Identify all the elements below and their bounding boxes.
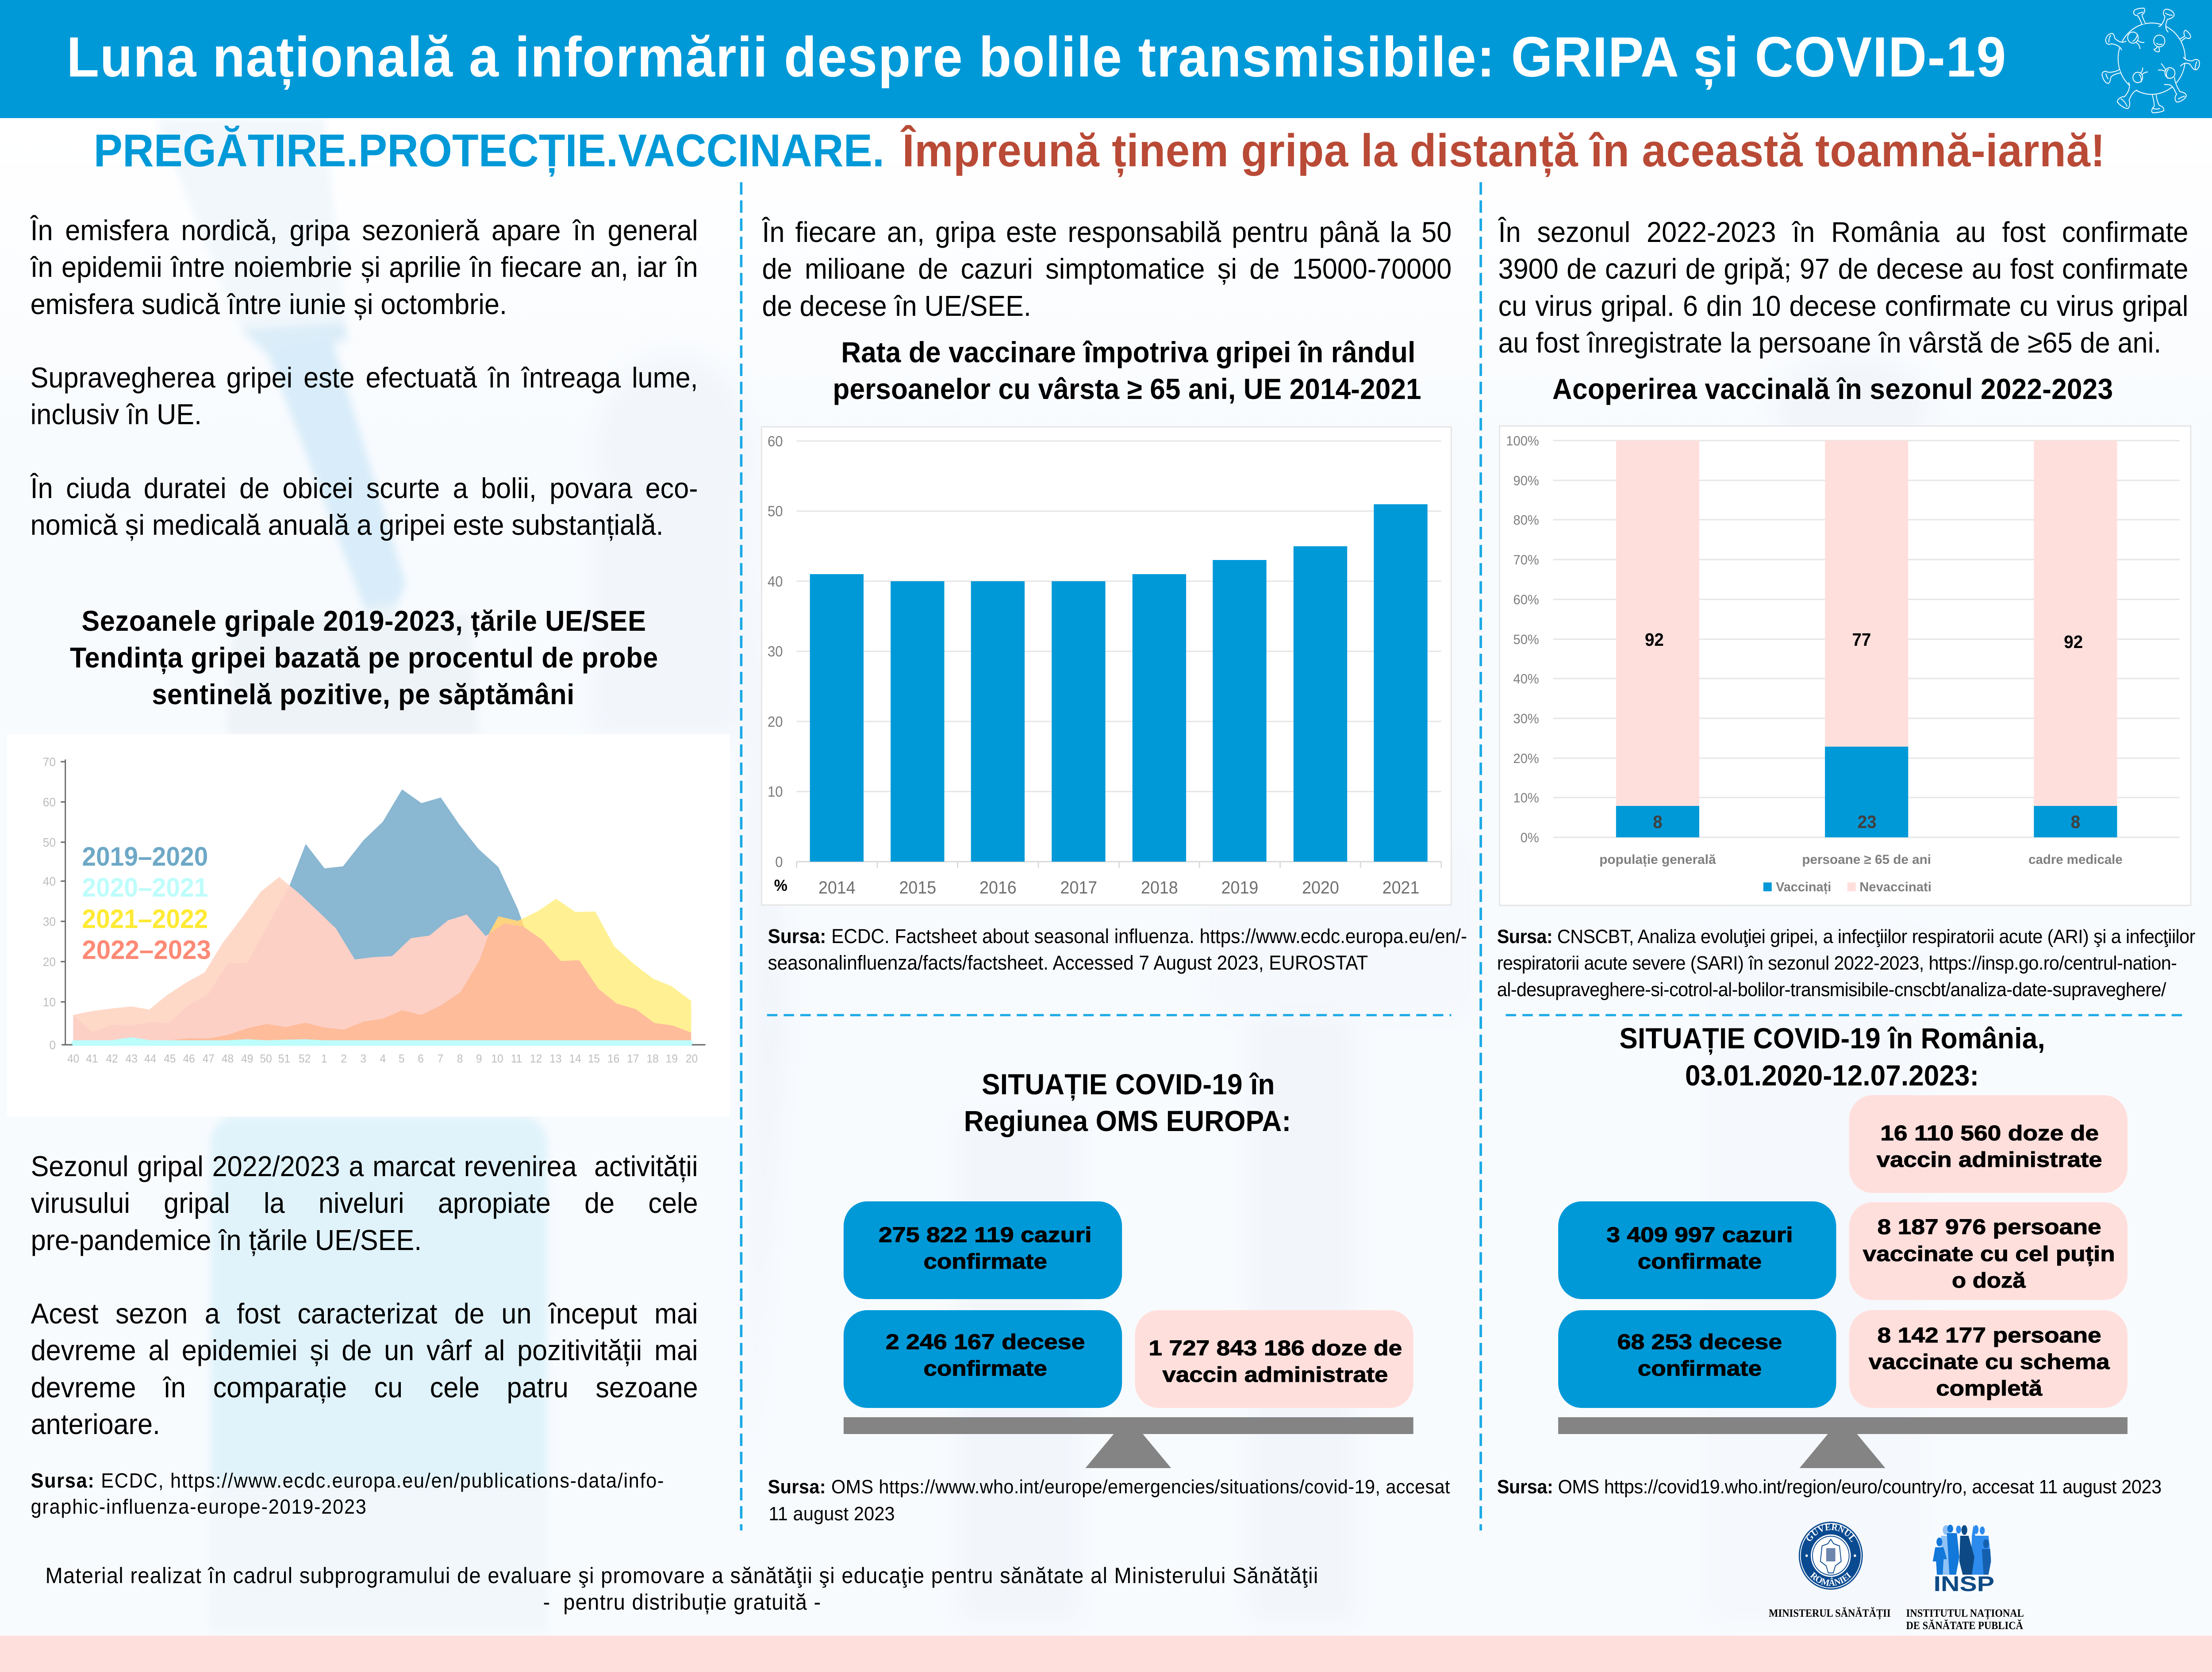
source: coverage chart: al-desupraveghere-si-cotrol-al-bolilor-transmisibile-cnscbt/analiza-date-supraveghere/ (1497, 979, 2166, 1001)
source: left column (31, 1470, 664, 1518)
stacked bar chart: vaccine coverage: 77 (1852, 630, 1871, 650)
bar chart: vaccination rate: 30 (768, 643, 783, 660)
box: doses (1849, 1095, 2128, 1193)
footer note: - pentru distribuție gratuită - (543, 1590, 821, 1614)
heading: vaccination rate chart (833, 336, 1421, 405)
footer band (0, 1636, 2212, 1672)
text block: EU burden: de milioane de cazuri simptomatice și de 15000-70000 (762, 253, 1452, 285)
area chart: flu seasons: 0 (49, 1038, 56, 1052)
area chart: flu seasons: 16 (607, 1052, 619, 1065)
logo: Guvernul României seal: GUVERNUL (1804, 1522, 1858, 1544)
box: at least one dose: vaccinate cu cel puțin (1863, 1242, 2115, 1266)
text block: early start: devreme al epidemiei și de un vârf al pozitivității mai (31, 1334, 698, 1366)
title: Luna națională a informării despre bolile transmisibile: GRIPA și COVID-19 (67, 26, 2006, 90)
stacked bar chart: vaccine coverage: 30% (1513, 711, 1539, 726)
area chart: flu seasons: 52 (299, 1052, 311, 1065)
box: cases: confirmate (1638, 1250, 1762, 1273)
area chart: flu seasons: 6 (418, 1052, 424, 1065)
bar chart: vaccination rate: 2014 (818, 878, 856, 897)
heading: COVID-19 Romania (1619, 1022, 2045, 1092)
area chart: flu seasons: 12 (530, 1052, 542, 1065)
header band (0, 0, 2212, 118)
text block: early start: devreme în comparație cu cele patru sezoane (31, 1371, 698, 1404)
bar chart: vaccination rate: 2020 (1302, 878, 1339, 897)
source: bar chart (768, 925, 1467, 974)
scale beam and pivot (1558, 1417, 2128, 1468)
stacked bar chart: vaccine coverage: 8 (1653, 812, 1663, 832)
stacked bar chart: vaccine coverage: cadre medicale (2028, 852, 2123, 867)
area chart: flu seasons: 50 (260, 1052, 272, 1065)
text block: Romania season: cu virus gripal. 6 din 10 decese confirmate cu virus gripal (1498, 290, 2188, 322)
bar chart: vaccination rate: 20 (768, 713, 783, 730)
area chart: flu seasons: 2 (341, 1052, 347, 1065)
box: at least one dose: 8 187 976 persoane (1878, 1215, 2101, 1239)
box: full schedule: 8 142 177 persoane (1878, 1323, 2101, 1347)
text block: Romania season: 3900 de cazuri de gripă; 97 de decese au fost confirmate (1498, 253, 2188, 285)
bar chart: vaccination rate: 60 (768, 433, 783, 449)
bar chart: vaccination rate: % (774, 877, 787, 894)
balance diagram: WHO Europe (844, 1201, 1413, 1468)
heading: flu seasons chart: Sezoanele gripale 2019-2023, țările UE/SEE (81, 605, 646, 637)
heading: COVID-19 WHO Europe: Regiunea OMS EUROPA: (964, 1104, 1291, 1137)
icon: virus (2102, 8, 2200, 113)
area chart: flu seasons: 14 (569, 1052, 581, 1065)
subtitle: PREGĂTIRE.PROTECȚIE.VACCINARE. (94, 125, 884, 177)
stacked bar chart: vaccine coverage: 60% (1513, 592, 1539, 607)
text block: northern hemisphere: În emisfera nordică, gripa sezonieră apare în general (31, 214, 698, 246)
area chart: flu seasons: 42 (106, 1052, 118, 1065)
box: doses: 1 727 843 186 doze de (1148, 1336, 1402, 1360)
chart legend: Nevaccinati (1859, 880, 1932, 894)
stacked bar chart: vaccine coverage: 20% (1513, 751, 1539, 766)
area chart: flu seasons: 7 (437, 1052, 443, 1065)
heading: flu seasons chart (70, 605, 658, 710)
text block: burden (31, 470, 698, 544)
logo: INSP: INSP (1934, 1572, 1994, 1595)
bar chart: vaccination rate: 40 (768, 573, 783, 590)
heading: COVID-19 WHO Europe: SITUAȚIE COVID-19 în (982, 1068, 1275, 1101)
background photo watermark: syringe, vial and silhouettes (155, 118, 1931, 1632)
box: cases: confirmate (923, 1250, 1047, 1273)
area chart: flu seasons: 30 (43, 914, 56, 928)
area chart: flu seasons: 40 (43, 874, 56, 888)
text block: surveillance (31, 359, 698, 433)
text block: season 2022/2023 (31, 1148, 698, 1259)
chart legend: Vaccinați (1776, 880, 1831, 894)
chart legend: 2021–2022 (82, 904, 208, 934)
stacked bar chart: vaccine coverage: 10% (1513, 790, 1539, 805)
stacked bar chart: vaccine coverage: 50% (1513, 632, 1539, 647)
scale beam and pivot (844, 1417, 1413, 1468)
area chart: flu seasons: 8 (457, 1052, 463, 1065)
text block: northern hemisphere (31, 212, 698, 323)
source: WHO Europe: 11 august 2023 (769, 1503, 895, 1525)
balance diagram: Romania (1558, 1095, 2128, 1468)
chart legend: 2019–2020 (82, 842, 208, 871)
area chart: flu seasons: 43 (126, 1052, 138, 1065)
text block: surveillance: inclusiv în UE. (31, 398, 202, 430)
source: coverage chart: Sursa: CNSCBT, Analiza evoluţiei gripei, a infecţiilor respiratorii acute (ARI) şi a infecţiilor (1497, 926, 2195, 947)
area chart: flu seasons: 4 (380, 1052, 386, 1065)
stacked bar chart: vaccine coverage: 80% (1513, 513, 1539, 528)
box: cases: 275 822 119 cazuri (879, 1223, 1092, 1246)
heading: vaccination rate chart: persoanelor cu vârsta ≥ 65 ani, UE 2014-2021 (833, 372, 1421, 405)
chart legend: 2022–2023 (82, 935, 211, 965)
heading: COVID-19 Romania: SITUAȚIE COVID-19 în România, (1619, 1022, 2045, 1055)
text block: burden: nomică și medicală anuală a gripei este substanțială. (31, 509, 664, 541)
area chart: flu seasons: 1 (321, 1052, 327, 1065)
box: deaths: 68 253 decese (1617, 1330, 1782, 1354)
stacked bar chart: vaccine coverage: persoane ≥ 65 de ani (1802, 852, 1931, 867)
bar chart: vaccination rate: 2019 (1221, 878, 1258, 897)
bar chart: vaccination rate: 2018 (1141, 878, 1178, 897)
text block: surveillance: Supravegherea gripei este efectuată în întreaga lume, (31, 361, 698, 394)
area chart: flu seasons: 3 (360, 1052, 366, 1065)
bar chart: vaccination rate: 50 (768, 503, 783, 519)
stacked bar chart: vaccine coverage: 90% (1513, 473, 1539, 488)
footer note: Material realizat în cadrul subprogramului de evaluare şi promovare a sănătăţii şi educaţie pentru sănătate al Ministerului Sănătăţii (46, 1564, 1318, 1588)
subtitle: Împreună ținem gripa la distanță în această toamnă-iarnă! (900, 125, 2105, 177)
area chart: flu seasons: 70 (43, 755, 56, 769)
area chart: flu seasons: 45 (164, 1052, 176, 1065)
stacked bar chart: vaccine coverage (1499, 426, 2191, 905)
bar chart: vaccination rate: 2016 (979, 878, 1017, 897)
box: at least one dose (1849, 1202, 2128, 1300)
box: deaths: confirmate (1638, 1357, 1762, 1380)
text block: EU burden: de decese în UE/SEE. (762, 290, 1031, 322)
source: coverage chart (1497, 926, 2195, 1001)
area chart: flu seasons: 19 (666, 1052, 678, 1065)
heading: flu seasons chart: sentinelă pozitive, pe săptămâni (152, 679, 574, 710)
stacked bar chart: vaccine coverage: 100% (1506, 433, 1539, 449)
footer note (46, 1564, 1318, 1614)
area chart: flu seasons: 47 (203, 1052, 215, 1065)
area chart: flu seasons: 40 (67, 1052, 79, 1065)
text block: northern hemisphere: emisfera sudică între iunie și octombrie. (31, 288, 507, 320)
area chart: flu seasons: 50 (43, 835, 56, 849)
source: left column: graphic-influenza-europe-2019-2023 (31, 1496, 366, 1518)
area chart: flu seasons: 48 (222, 1052, 234, 1065)
source: coverage chart: respiratorii acute severe (SARI) în sezonul 2022-2023, https://insp.go.ro/centrul-nation- (1497, 952, 2177, 974)
box: full schedule (1849, 1310, 2128, 1408)
area chart: flu seasons: 15 (588, 1052, 600, 1065)
logo: Guvernul României seal (1799, 1522, 1863, 1590)
area chart: flu seasons: 10 (492, 1052, 503, 1065)
area chart: flu seasons: 46 (183, 1052, 195, 1065)
area chart: flu seasons: 10 (43, 995, 56, 1009)
area chart: flu seasons: 5 (399, 1052, 405, 1065)
text block: Romania season: În sezonul 2022-2023 în România au fost confirmate (1498, 216, 2188, 248)
text block: Romania season (1498, 214, 2188, 362)
heading: vaccination rate chart: Rata de vaccinare împotriva gripei în rândul (841, 336, 1415, 368)
stacked bar chart: vaccine coverage: 23 (1858, 812, 1877, 832)
heading: vaccine coverage chart: Acoperirea vaccinală în sezonul 2022-2023 (1552, 372, 2113, 405)
logo: Guvernul României seal: ROMÂNIEI (1809, 1570, 1853, 1588)
area chart: flu seasons: 9 (476, 1052, 482, 1065)
box: cases (844, 1201, 1122, 1299)
box: deaths (1558, 1310, 1836, 1408)
text block: burden: În ciuda duratei de obicei scurte a bolii, povara eco- (31, 472, 698, 504)
bar chart: vaccination rate: 2021 (1382, 878, 1419, 897)
heading: COVID-19 WHO Europe (964, 1068, 1291, 1137)
text block: season 2022/2023: Sezonul gripal 2022/2023 a marcat revenirea activității (31, 1150, 698, 1182)
source: left column: Sursa: ECDC, https://www.ecdc.europa.eu/en/publications-data/info- (31, 1470, 664, 1492)
chart legend (1763, 880, 1932, 894)
box: doses: 16 110 560 doze de (1880, 1121, 2099, 1145)
area chart: flu seasons: 13 (549, 1052, 561, 1065)
area chart: flu seasons: 41 (86, 1052, 98, 1065)
text block: EU burden (762, 214, 1452, 325)
box: cases (1558, 1201, 1836, 1299)
text block: northern hemisphere: în epidemii între noiembrie și aprilie în fiecare an, iar în (31, 251, 698, 283)
source: bar chart: seasonalinfluenza/facts/factsheet. Accessed 7 August 2023, EUROSTAT (768, 952, 1368, 974)
area chart: flu seasons (7, 734, 730, 1116)
stacked bar chart: vaccine coverage: populație generală (1599, 852, 1716, 867)
text block: early start (31, 1295, 698, 1444)
source: Romania COVID: Sursa: OMS https://covid19.who.int/region/euro/country/ro, accesat 11 august 2023 (1497, 1476, 2162, 1498)
bar chart: vaccination rate: 2015 (899, 878, 936, 897)
box: doses: vaccin administrate (1162, 1363, 1388, 1386)
area chart: flu seasons: 17 (627, 1052, 639, 1065)
box: deaths: confirmate (923, 1357, 1047, 1380)
heading: COVID-19 Romania: 03.01.2020-12.07.2023: (1685, 1059, 1979, 1092)
bar chart: vaccination rate (762, 427, 1451, 905)
stacked bar chart: vaccine coverage: 92 (2064, 632, 2083, 652)
text block: EU burden: În fiecare an, gripa este responsabilă pentru până la 50 (762, 216, 1452, 248)
bar chart: vaccination rate: 2017 (1060, 878, 1097, 897)
area chart: flu seasons: 20 (686, 1052, 698, 1065)
area chart: flu seasons: 18 (646, 1052, 659, 1065)
bar chart: vaccination rate: 10 (768, 783, 783, 800)
logo captions (1769, 1607, 2024, 1632)
area chart: flu seasons: 60 (43, 795, 56, 809)
source: WHO Europe (768, 1476, 1450, 1525)
logo captions: DE SĂNĂTATE PUBLICĂ (1906, 1619, 2023, 1632)
logo captions: MINISTERUL SĂNĂTĂȚII (1769, 1607, 1891, 1620)
stacked bar chart: vaccine coverage: 92 (1645, 630, 1664, 650)
source: bar chart: Sursa: ECDC. Factsheet about seasonal influenza. https://www.ecdc.europa.eu/en/- (768, 925, 1467, 947)
area chart: flu seasons: 20 (43, 955, 56, 969)
chart legend: 2020–2021 (82, 873, 208, 902)
box: cases: 3 409 997 cazuri (1606, 1223, 1793, 1246)
box: doses: vaccin administrate (1877, 1148, 2102, 1171)
text block: season 2022/2023: pre-pandemice în țările UE/SEE. (31, 1224, 422, 1256)
chart legend (82, 842, 211, 965)
stacked bar chart: vaccine coverage: 0% (1521, 830, 1539, 845)
box: full schedule: vaccinate cu schema (1869, 1350, 2110, 1373)
heading: flu seasons chart: Tendința gripei bazată pe procentul de probe (70, 642, 658, 674)
box: at least one dose: o doză (1952, 1269, 2026, 1292)
text block: season 2022/2023: virusului gripal la niveluri apropiate de cele (31, 1187, 698, 1219)
source: WHO Europe: Sursa: OMS https://www.who.int/europe/emergencies/situations/covid-19, accesat (768, 1476, 1450, 1498)
area chart: flu seasons: 44 (144, 1052, 156, 1065)
logo captions: INSTITUTUL NAȚIONAL (1906, 1607, 2024, 1620)
stacked bar chart: vaccine coverage: 70% (1513, 552, 1539, 568)
text block: Romania season: au fost înregistrate la persoane în vârstă de ≥65 de ani. (1498, 326, 2161, 359)
box: deaths (844, 1310, 1122, 1408)
subtitle (94, 125, 2105, 177)
box: doses (1135, 1310, 1413, 1408)
box: deaths: 2 246 167 decese (886, 1330, 1085, 1354)
box: full schedule: completă (1936, 1377, 2043, 1400)
logo: INSP (1933, 1525, 1994, 1595)
stacked bar chart: vaccine coverage: 8 (2071, 812, 2080, 832)
bar chart: vaccination rate: 0 (775, 854, 783, 870)
text block: early start: anterioare. (31, 1408, 160, 1440)
area chart: flu seasons: 51 (278, 1052, 290, 1065)
stacked bar chart: vaccine coverage: 40% (1513, 671, 1539, 686)
text block: early start: Acest sezon a fost caracterizat de un început mai (31, 1297, 698, 1330)
area chart: flu seasons: 11 (511, 1052, 522, 1065)
area chart: flu seasons: 49 (241, 1052, 253, 1065)
